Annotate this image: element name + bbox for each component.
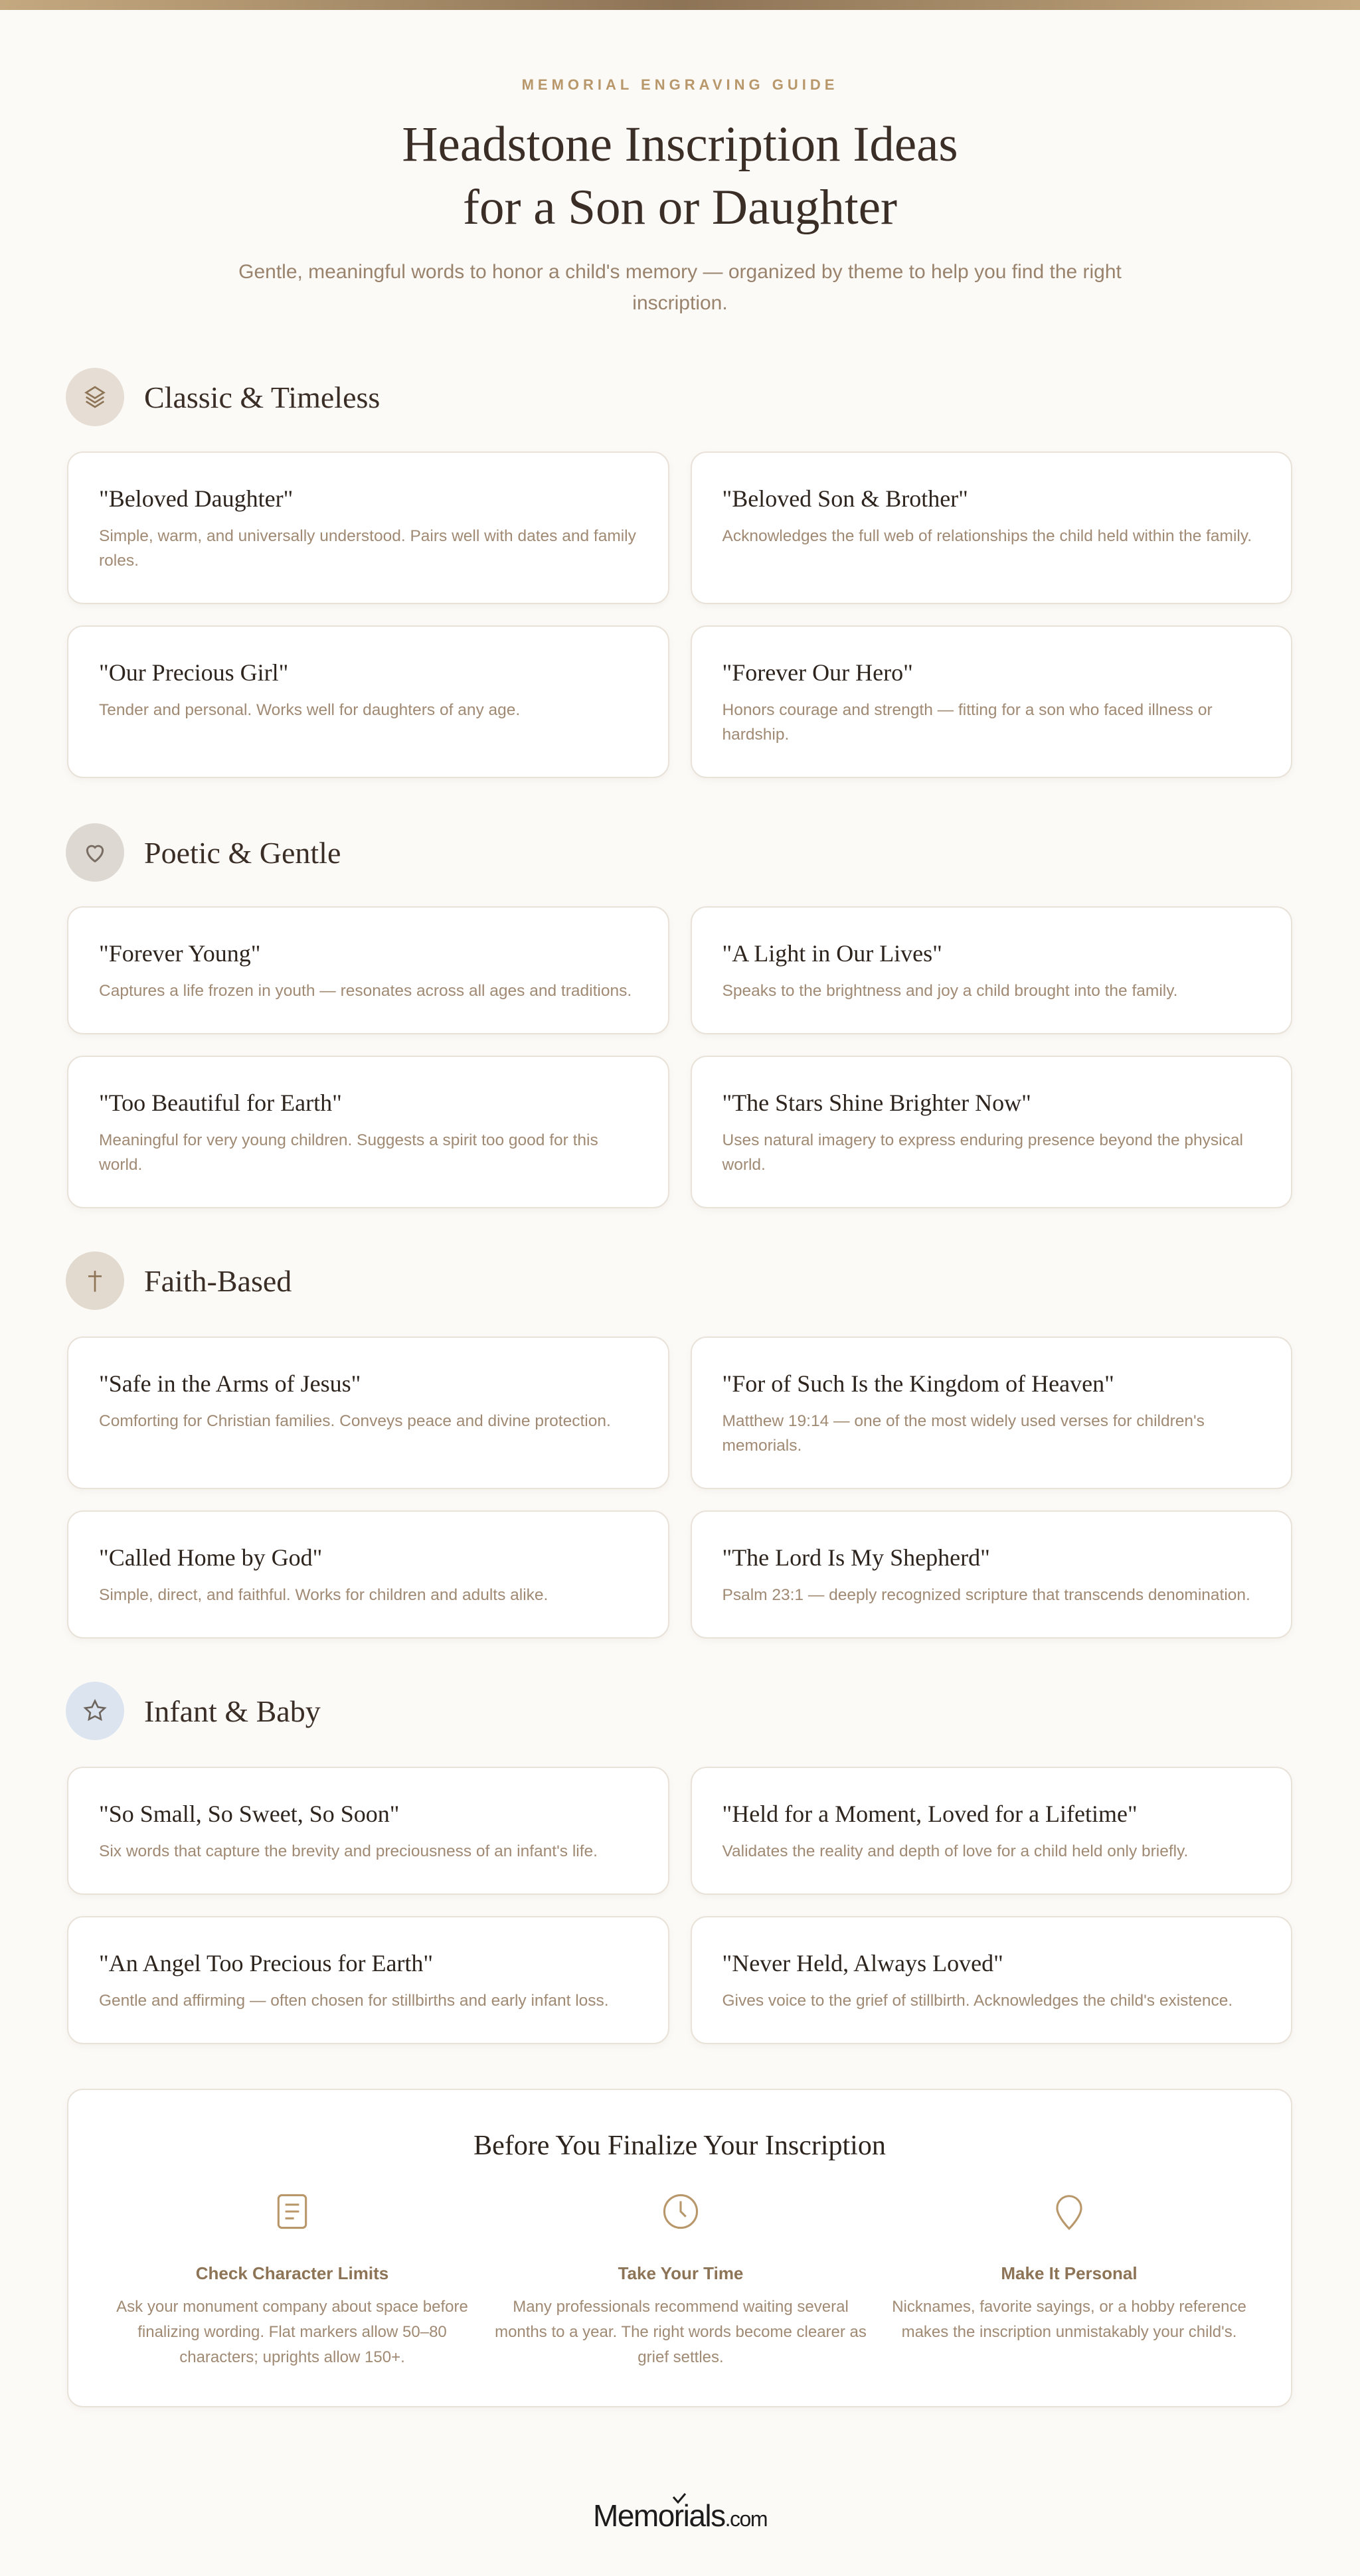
card: Speaks to the brightness and joy a child brought into the family. xyxy=(722,982,1177,1000)
card: Simple, direct, and faithful. Works for children and adults alike. xyxy=(99,1586,548,1604)
card: Matthew 19:14 — one of the most widely used verses for children's memorials. xyxy=(722,1412,1205,1455)
card: "The Lord Is My Shepherd" xyxy=(722,1544,990,1571)
tip: take your time xyxy=(495,2194,867,2366)
card xyxy=(691,1336,1292,1489)
tip: take your time: Many professionals recommend waiting several months to a year. The right words become clearer as grief settles. xyxy=(495,2298,867,2366)
card: Acknowledges the full web of relationships the child held within the family. xyxy=(722,527,1252,545)
card: "Called Home by God" xyxy=(99,1544,322,1571)
cards: faith xyxy=(67,1336,1292,1639)
title: for a Son or Daughter xyxy=(463,180,897,235)
card: "An Angel Too Precious for Earth" xyxy=(99,1950,433,1976)
tip: take your time: Take Your Time xyxy=(618,2263,743,2283)
card: "Forever Our Hero" xyxy=(722,659,913,686)
card: Validates the reality and depth of love for a child held only briefly. xyxy=(722,1842,1188,1860)
card xyxy=(67,906,669,1034)
card: "So Small, So Sweet, So Soon" xyxy=(99,1801,399,1827)
subtitle: Gentle, meaningful words to honor a child's memory — organized by theme to help you find the right inscription. xyxy=(238,261,1122,314)
card: Meaningful for very young children. Suggests a spirit too good for this world. xyxy=(99,1131,598,1174)
card xyxy=(67,1510,669,1639)
card: Gives voice to the grief of stillbirth. Acknowledges the child's existence. xyxy=(722,1992,1232,2010)
card: "Beloved Son & Brother" xyxy=(722,485,968,512)
card xyxy=(691,1916,1292,2044)
card: Simple, warm, and universally understood. Pairs well with dates and family roles. xyxy=(99,527,636,570)
card: Tender and personal. Works well for daughters of any age. xyxy=(99,701,520,719)
section heading: poetic: Poetic & Gentle xyxy=(144,835,341,870)
card: "Our Precious Girl" xyxy=(99,659,288,686)
card: Psalm 23:1 — deeply recognized scripture that transcends denomination. xyxy=(722,1586,1250,1604)
section heading: classic: Classic & Timeless xyxy=(144,380,380,414)
section heading: classic xyxy=(66,368,380,426)
title xyxy=(402,117,958,235)
logo: Memorials.com xyxy=(593,2498,767,2533)
cards: poetic xyxy=(67,906,1292,1209)
section heading: poetic xyxy=(66,823,341,882)
card xyxy=(691,625,1292,778)
card: Honors courage and strength — fitting for a son who faced illness or hardship. xyxy=(722,701,1213,744)
card xyxy=(691,451,1292,604)
panel heading: Before You Finalize Your Inscription xyxy=(473,2131,886,2161)
tip: make it personal: Make It Personal xyxy=(1001,2263,1138,2283)
section heading: infant xyxy=(66,1682,321,1740)
section heading: infant: Infant & Baby xyxy=(144,1694,321,1728)
tip: make it personal xyxy=(892,2195,1246,2341)
card: "For of Such Is the Kingdom of Heaven" xyxy=(722,1370,1114,1397)
tip: character limits: Ask your monument company about space before finalizing wording. Flat markers allow 50–80 characters; uprights allow 150+. xyxy=(116,2298,468,2366)
card xyxy=(691,1510,1292,1639)
card xyxy=(691,1767,1292,1895)
card: "The Stars Shine Brighter Now" xyxy=(722,1089,1031,1116)
icon: heart xyxy=(66,823,124,882)
card: Six words that capture the brevity and preciousness of an infant's life. xyxy=(99,1842,598,1860)
card xyxy=(67,1767,669,1895)
card xyxy=(691,906,1292,1034)
icon: star xyxy=(66,1682,124,1740)
card: "Never Held, Always Loved" xyxy=(722,1950,1003,1976)
card xyxy=(691,1056,1292,1208)
card xyxy=(67,1056,669,1208)
title: Headstone Inscription Ideas xyxy=(402,117,958,172)
card xyxy=(67,451,669,604)
tip: character limits: Check Character Limits xyxy=(196,2263,388,2283)
panel: before you finalize xyxy=(67,2089,1292,2407)
tip: character limits xyxy=(116,2194,468,2366)
section heading: faith: Faith-Based xyxy=(144,1264,292,1297)
tip: make it personal: Nicknames, favorite sayings, or a hobby reference makes the inscription unmistakably your child's. xyxy=(892,2298,1246,2341)
card: "Forever Young" xyxy=(99,940,260,967)
card: "Beloved Daughter" xyxy=(99,485,293,512)
card: Uses natural imagery to express enduring presence beyond the physical world. xyxy=(722,1131,1243,1174)
cards: classic xyxy=(67,451,1292,779)
card: Captures a life frozen in youth — resonates across all ages and traditions. xyxy=(99,982,632,1000)
section heading: faith xyxy=(66,1251,292,1310)
card: "Safe in the Arms of Jesus" xyxy=(99,1370,361,1397)
card: "Held for a Moment, Loved for a Lifetime" xyxy=(722,1801,1138,1827)
card xyxy=(67,1336,669,1489)
card: "Too Beautiful for Earth" xyxy=(99,1089,342,1116)
card xyxy=(67,1916,669,2044)
icon: cross xyxy=(66,1251,124,1310)
card: Comforting for Christian families. Conveys peace and divine protection. xyxy=(99,1412,611,1430)
card xyxy=(67,625,669,778)
cards: infant xyxy=(67,1767,1292,2045)
card: Gentle and affirming — often chosen for stillbirths and early infant loss. xyxy=(99,1992,609,2010)
icon: layers xyxy=(66,368,124,426)
card: "A Light in Our Lives" xyxy=(722,940,942,967)
kicker: MEMORIAL ENGRAVING GUIDE xyxy=(522,76,838,93)
